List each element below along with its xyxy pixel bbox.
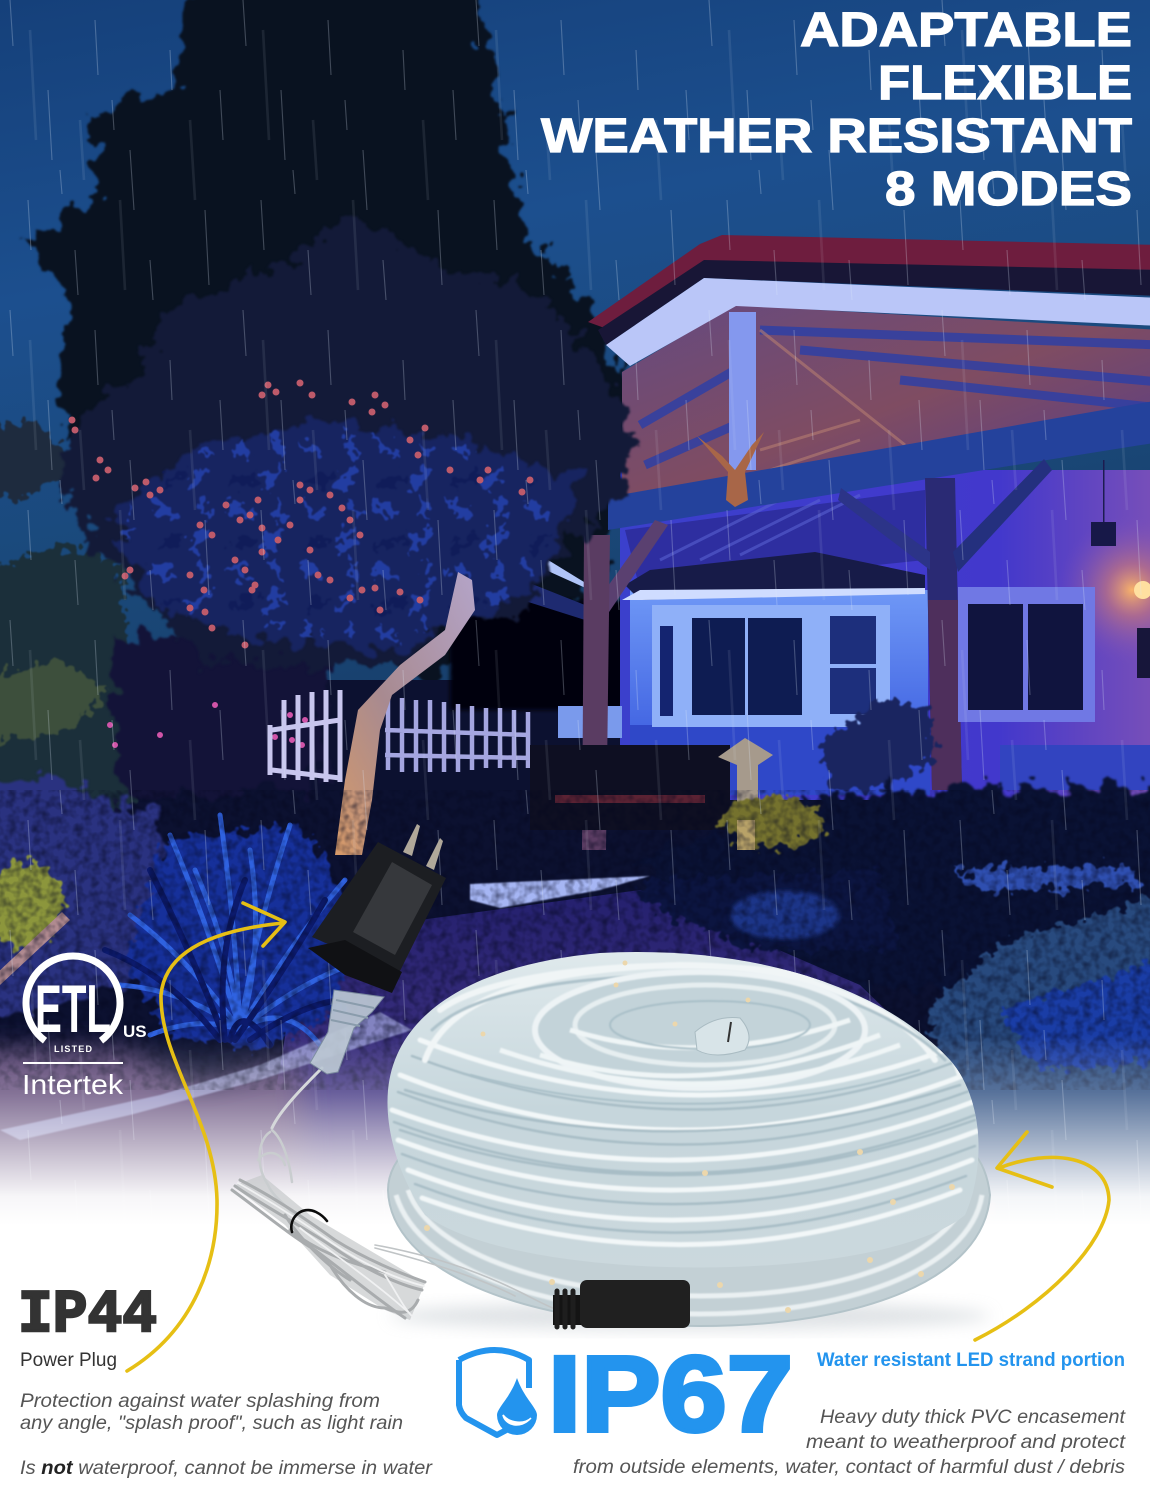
left garden bush — [0, 775, 175, 1020]
end cap mark — [728, 1022, 731, 1042]
bundle highlights — [238, 1183, 424, 1316]
gutter post — [729, 312, 756, 470]
foliage speckle — [0, 790, 1150, 1090]
sofa on patio — [1000, 745, 1150, 790]
ETL listed certification mark: US — [123, 1022, 147, 1041]
cord from plug to loop — [272, 1068, 322, 1128]
garden ground base — [0, 680, 1150, 1240]
top loop — [258, 1130, 295, 1215]
agave leaves — [105, 815, 350, 1045]
thin clear cord bundle — [232, 1068, 553, 1320]
coil center hollow — [535, 972, 865, 1088]
bundle translucent body — [233, 1175, 425, 1320]
diagonal brace right — [953, 459, 1052, 572]
lantern wall glow — [1057, 515, 1150, 665]
arrow: to LED strand — [975, 1132, 1109, 1340]
porch lantern — [1134, 581, 1150, 678]
ETL listed certification mark: LISTED — [54, 1044, 92, 1054]
hanging lamp — [1091, 460, 1116, 546]
lower left pine highlight — [0, 660, 110, 745]
walk edge light — [0, 1012, 412, 1140]
main window — [652, 605, 890, 727]
IP44 description: any angle, "splash proof", such as light rain — [20, 1413, 403, 1434]
bonsai — [820, 700, 935, 790]
glowing eave — [606, 278, 1150, 366]
large dark tree silhouette — [20, 0, 640, 680]
fruit tree trunk — [335, 572, 475, 855]
IP44 description — [20, 1391, 433, 1479]
wall below the beam — [620, 470, 1150, 800]
IP67 rating: IP67 — [548, 1333, 793, 1454]
wooden post right — [925, 478, 962, 790]
title: feature list: WEATHER RESISTANT — [541, 110, 1132, 163]
agave base — [125, 825, 350, 1050]
roof dark fascia — [598, 260, 1150, 345]
sky — [0, 0, 1150, 820]
ETL listed certification mark: ETL — [35, 971, 111, 1047]
IP44 description: Protection against water splashing from — [20, 1391, 380, 1412]
lit leaves in canopy — [110, 420, 580, 650]
fence posts right — [385, 698, 530, 772]
strand label: Water resistant LED strand portion — [817, 1350, 1125, 1371]
patio furniture — [530, 745, 730, 830]
blue agave plant — [105, 815, 350, 1050]
IP67 description: Heavy duty thick PVC encasement — [820, 1407, 1126, 1428]
IP67 panel — [459, 1333, 1126, 1478]
bottom ring highlights — [396, 1190, 982, 1314]
plug clear strain relief — [310, 990, 384, 1074]
icon: water shield — [459, 1350, 537, 1435]
bay window wall — [630, 590, 928, 750]
title: feature list: 8 MODES — [885, 163, 1132, 216]
ETL listed certification mark — [22, 956, 147, 1100]
canopy leaf texture — [120, 430, 560, 640]
deer trophy — [697, 432, 764, 507]
white fade to bottom — [0, 1035, 1150, 1225]
rope light coil — [387, 952, 990, 1330]
black twist tie — [291, 1210, 327, 1232]
yellow lit leaves — [0, 861, 63, 949]
lit eave strip — [528, 555, 590, 590]
garden shrubs right — [640, 785, 1150, 990]
title: feature list: ADAPTABLE — [800, 4, 1132, 57]
main bundle — [232, 1180, 425, 1318]
coil shadow — [390, 1302, 990, 1330]
ETL listed certification mark: Intertek — [22, 1069, 124, 1100]
bottom loose ring — [388, 1130, 990, 1326]
plug flange — [308, 940, 402, 993]
post lower warm tint — [928, 600, 962, 790]
lower ceiling rafters — [660, 495, 860, 560]
roof tiles — [588, 235, 1150, 330]
ceiling blue stripes — [640, 330, 1150, 465]
shrub highlights — [950, 865, 1140, 892]
plug prongs — [403, 824, 443, 870]
lower soffit roof — [625, 552, 925, 600]
arrow: to power plug — [127, 903, 285, 1371]
plug black body — [312, 842, 446, 975]
main cross beam — [608, 400, 1150, 530]
dirt ground left — [0, 1050, 310, 1250]
rafters — [760, 330, 905, 470]
strand black end connector — [553, 1280, 690, 1328]
plug label — [353, 862, 432, 955]
IP67 description — [573, 1407, 1126, 1478]
right conifer shrub — [925, 885, 1150, 1240]
walkway light strips — [470, 876, 650, 908]
main coil mound — [387, 952, 979, 1268]
lantern post — [737, 820, 755, 850]
blue shrub spot — [730, 891, 840, 939]
title: feature list: FLEXIBLE — [878, 57, 1132, 110]
underside of patio roof — [622, 305, 1150, 510]
furniture red seat — [555, 795, 705, 803]
coil strand windings — [392, 965, 980, 1245]
fruit tree canopy — [60, 215, 640, 670]
diagonal brace left — [838, 488, 930, 570]
center windings — [470, 972, 920, 1104]
power plug label: Power Plug — [20, 1350, 117, 1371]
brace left — [598, 520, 668, 618]
light branch — [0, 912, 70, 985]
flowers near fence — [110, 705, 305, 745]
IP67 description: from outside elements, water, contact of harmful dust / debris — [573, 1457, 1126, 1478]
bright fence behind patio — [558, 706, 622, 738]
stone lantern — [718, 738, 773, 810]
wall under bay — [630, 725, 930, 795]
far left pine branches — [0, 420, 85, 500]
fruit clusters — [72, 383, 530, 645]
lit foliage by lantern — [720, 796, 824, 848]
lower ceiling below beam — [625, 490, 925, 590]
house — [522, 235, 1150, 850]
dark backdrop behind fence and patio — [450, 600, 640, 710]
fence posts left — [270, 690, 340, 782]
lower left pines — [0, 545, 160, 840]
IP44 panel — [18, 1282, 433, 1479]
relief ribs — [331, 1000, 374, 1026]
left patio roof — [522, 580, 585, 620]
title: feature list — [541, 4, 1132, 216]
flower bush by fence — [110, 620, 330, 800]
IP67 description: meant to weatherproof and protect — [806, 1432, 1126, 1453]
power plug adapter — [308, 824, 446, 1074]
IP44 rating: IP44 — [18, 1282, 157, 1350]
LED dots — [424, 960, 955, 1313]
right shrub lit patches — [1000, 950, 1150, 1070]
strand end cap — [695, 1018, 749, 1055]
lit bay edge — [622, 588, 925, 600]
right window — [958, 587, 1095, 722]
wooden post left — [582, 535, 610, 850]
dark shrub base — [640, 870, 900, 950]
walkway — [250, 890, 1010, 1240]
IP44 description: Is not waterproof, cannot be immerse in water — [20, 1458, 433, 1479]
wire to connector — [375, 1245, 553, 1308]
